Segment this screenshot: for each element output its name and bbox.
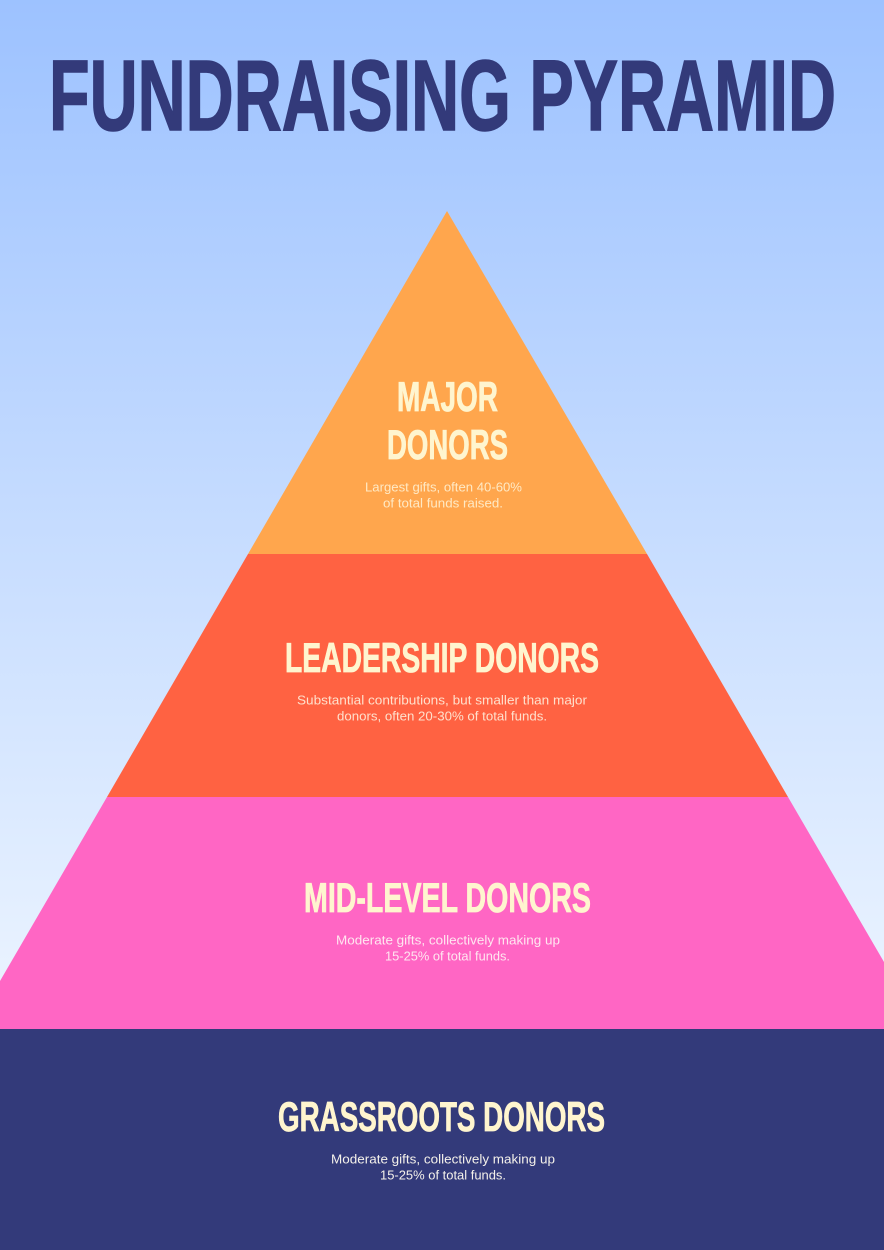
pyramid tier: leadership donors	[107, 554, 788, 797]
heading: leadership donors: LEADERSHIP DONORS	[285, 634, 599, 681]
description: grassroots donors: 15-25% of total funds.	[380, 1168, 506, 1182]
heading: major donors: DONORS	[387, 421, 508, 468]
description: major donors	[365, 480, 522, 510]
description: leadership donors: donors, often 20-30% of total funds.	[337, 710, 547, 724]
heading: mid-level donors: MID-LEVEL DONORS	[304, 874, 591, 921]
description: grassroots donors: Moderate gifts, collectively making up	[331, 1152, 555, 1166]
pyramid tier: major donors	[248, 211, 647, 554]
description: leadership donors	[297, 694, 587, 724]
pyramid tier: grassroots donors	[0, 1029, 884, 1250]
heading: major donors: MAJOR	[397, 373, 498, 420]
description: major donors: Largest gifts, often 40-60%	[365, 480, 522, 494]
description: mid-level donors: 15-25% of total funds.	[385, 950, 510, 964]
heading: major donors	[387, 373, 508, 468]
description: mid-level donors: Moderate gifts, collectively making up	[336, 934, 560, 948]
description: mid-level donors	[336, 934, 560, 964]
description: major donors: of total funds raised.	[383, 496, 503, 510]
description: leadership donors: Substantial contributions, but smaller than major	[297, 694, 587, 708]
pyramid tier: mid-level donors	[0, 797, 884, 1029]
description: grassroots donors	[331, 1152, 555, 1182]
heading: grassroots donors: GRASSROOTS DONORS	[278, 1093, 605, 1140]
